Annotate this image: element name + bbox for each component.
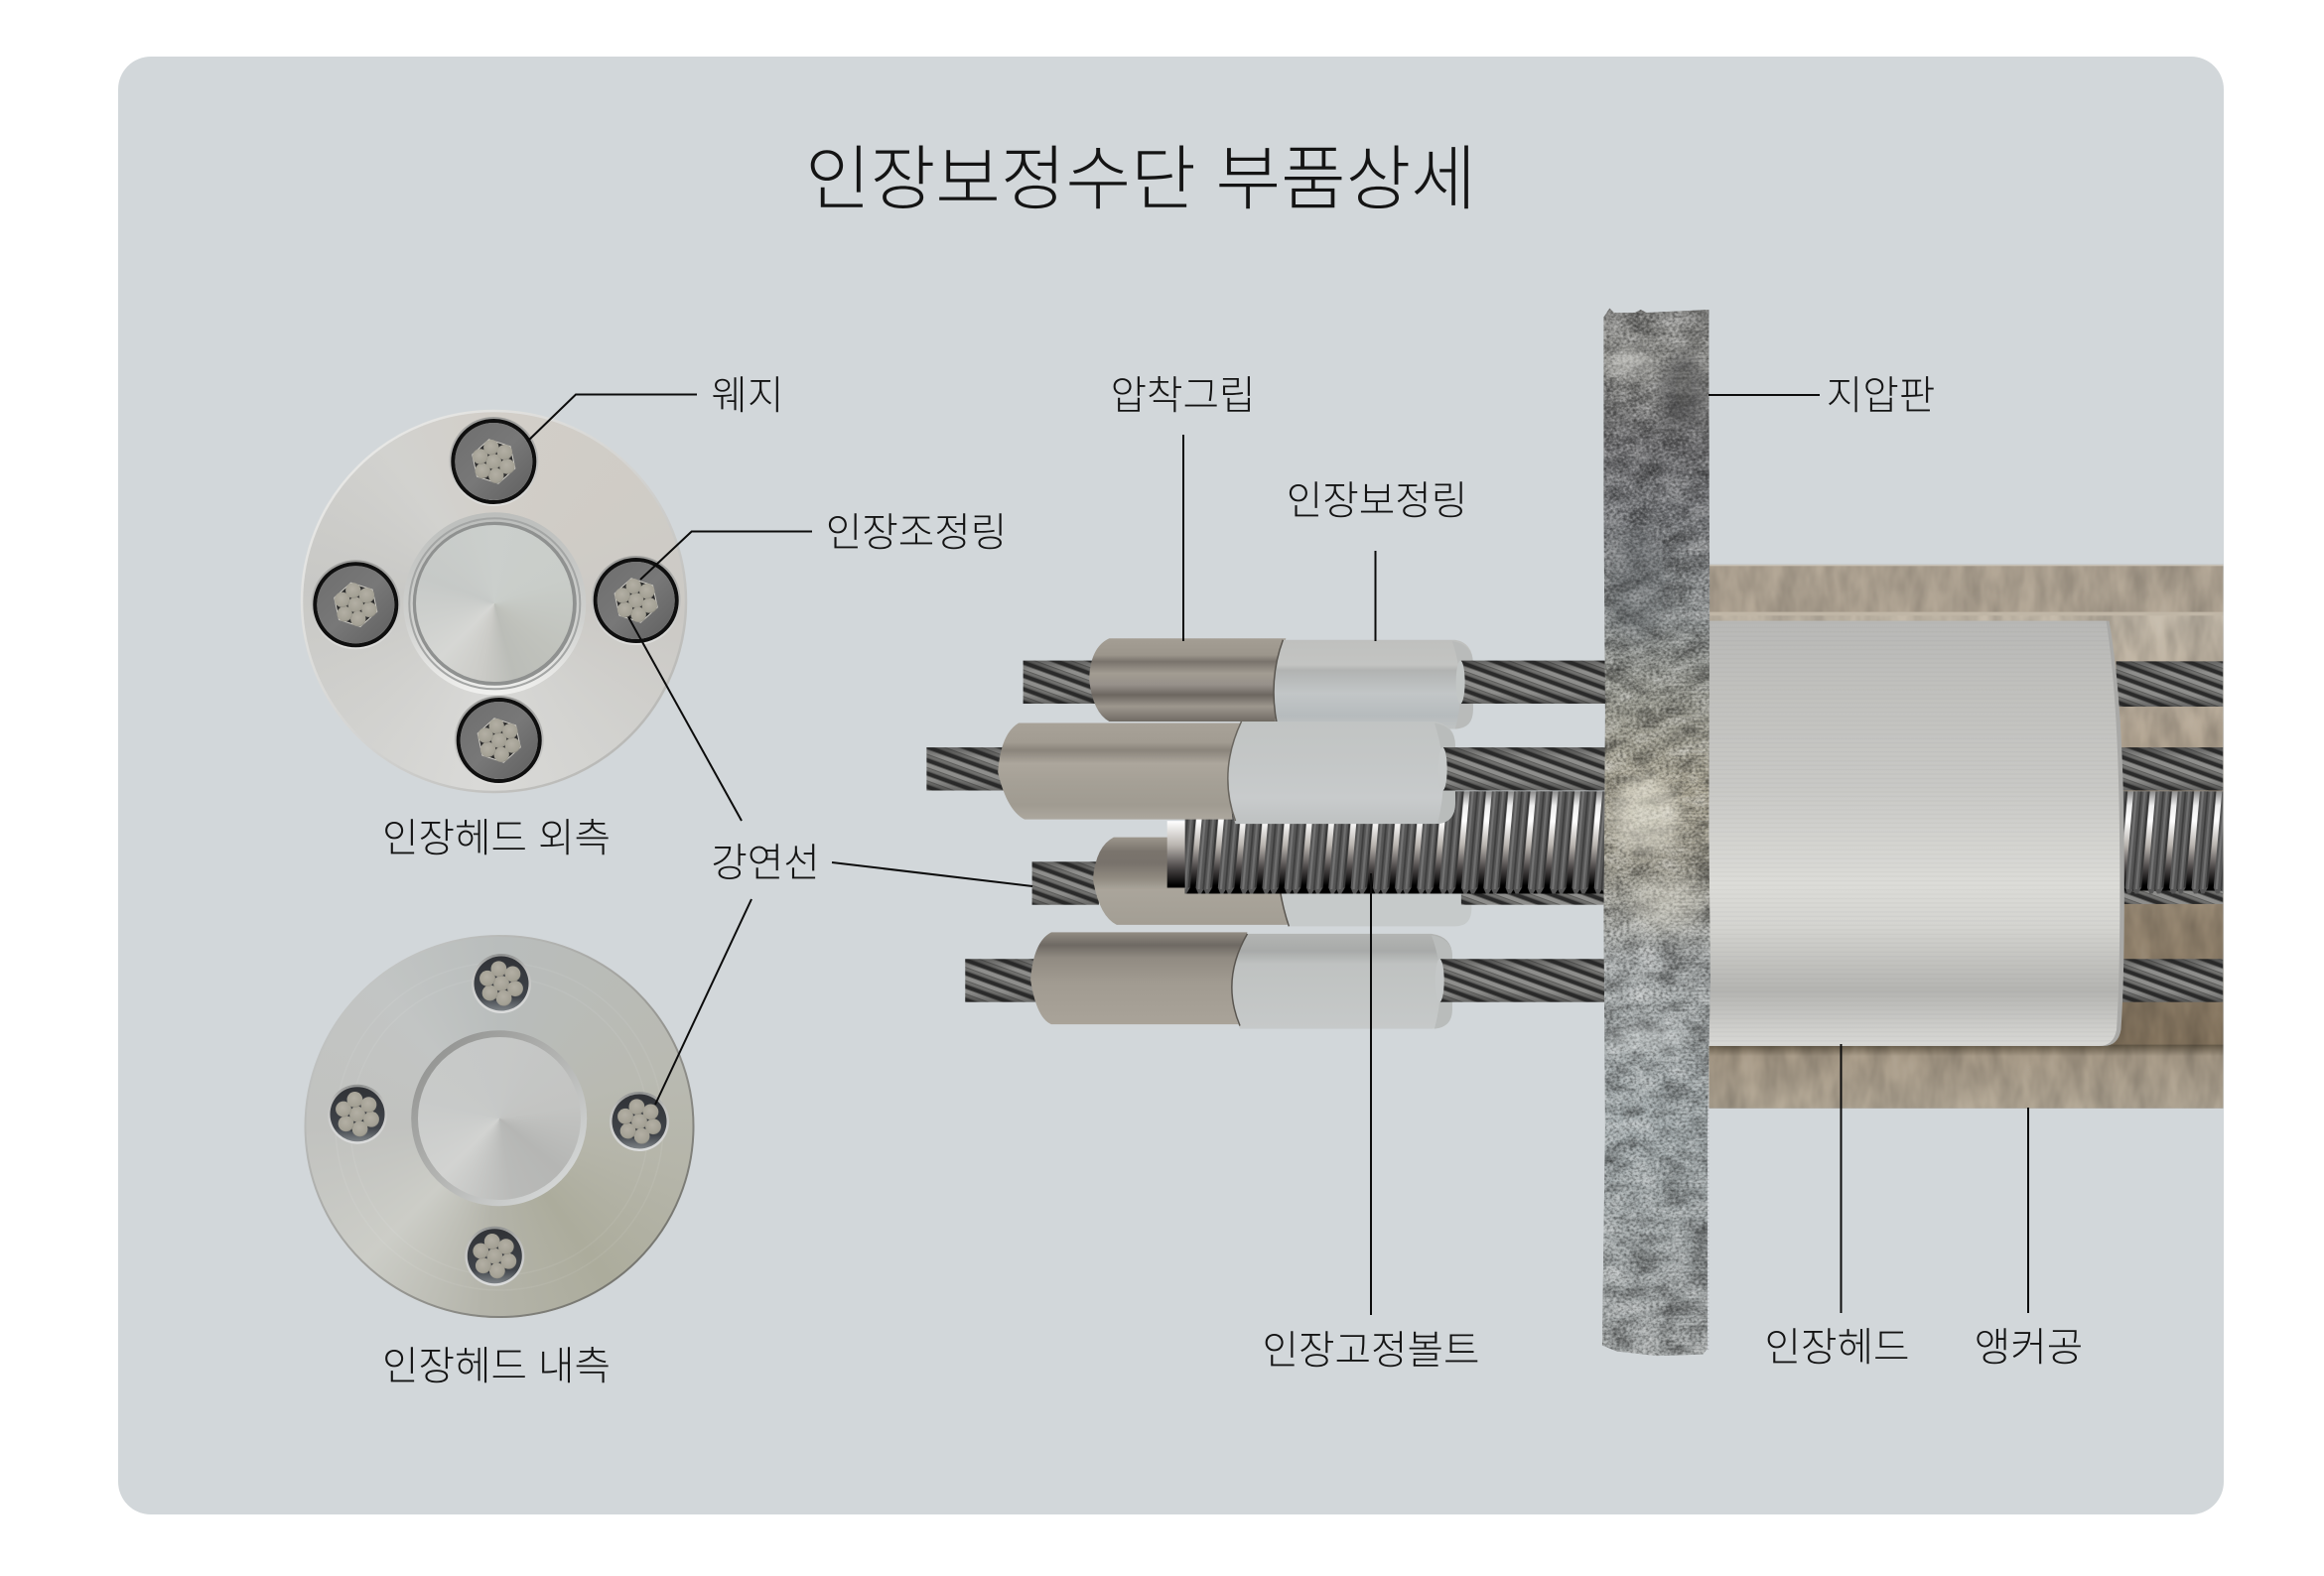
leader: wedge <box>527 395 697 442</box>
label: tension adjustment ring: 인장조정링 <box>826 511 1007 555</box>
wedge right <box>592 556 681 645</box>
diagram canvas <box>301 145 2224 1383</box>
strand hole left <box>328 1085 387 1144</box>
row 3 compression grip <box>1093 838 1288 925</box>
threaded tension fixing bolt <box>1167 791 1611 893</box>
center boss of outer side <box>403 512 586 695</box>
grips and rings assembly <box>926 638 1611 1029</box>
leader: bearing plate <box>1709 394 1820 396</box>
label: strand: 강연선 <box>711 842 820 885</box>
label: fixing bolt: 인장고정볼트 <box>1262 1329 1480 1373</box>
leader: fixing bolt <box>1370 873 1372 1315</box>
label: compression grip: 압착그립 <box>1110 374 1256 418</box>
wedge left <box>311 560 400 649</box>
label: wedge: 웨지 <box>711 374 784 418</box>
wedge bottom <box>455 696 544 785</box>
row 1 strand <box>1024 661 1112 704</box>
row 1 tension compensation ring <box>1274 640 1611 728</box>
leader: strand to outer side <box>628 617 742 821</box>
center boss of inner side <box>411 1030 587 1206</box>
row 4 strand <box>965 959 1039 1002</box>
label: tension head: 인장헤드 <box>1764 1326 1910 1370</box>
strand hole bottom <box>465 1227 524 1286</box>
strand hole right <box>610 1092 669 1151</box>
disc: tension head outer side <box>301 410 687 793</box>
title: 인장보정수단 부품상세 <box>805 140 1476 219</box>
label: bearing plate: 지압판 <box>1827 374 1935 418</box>
leader: compression grip <box>1182 435 1184 641</box>
row 2 strand <box>926 747 1016 791</box>
tension head cylinder <box>1709 621 2124 1046</box>
leader: anchor hole <box>2027 1108 2029 1313</box>
label: compensation ring: 인장보정링 <box>1287 479 1467 523</box>
row 3 tension compensation ring <box>1277 838 1611 926</box>
disc: tension head inner side <box>305 936 694 1318</box>
row 2 tension compensation ring <box>1228 722 1611 824</box>
leader: compensation ring <box>1374 551 1376 641</box>
row 4 compression grip <box>1030 932 1247 1024</box>
label: anchor hole: 앵커공 <box>1975 1326 2083 1370</box>
leader: tension head <box>1841 1044 1843 1313</box>
strands and bolt behind head <box>2117 661 2223 1002</box>
leader: tension adjustment ring <box>640 532 812 580</box>
row 3 strand <box>1032 861 1099 905</box>
bearing plate <box>1602 309 1710 1356</box>
row 1 compression grip <box>1089 638 1286 722</box>
anchor hole <box>1709 565 2224 1109</box>
row 4 tension compensation ring <box>1232 934 1611 1029</box>
wedge top <box>449 417 538 506</box>
leader: strand to inner side <box>655 899 752 1105</box>
leader: strand to cable <box>832 862 1032 886</box>
label: head outer: 인장헤드 외측 <box>382 817 611 860</box>
strand hole top <box>472 954 531 1013</box>
row 2 compression grip <box>998 722 1241 820</box>
label: head inner: 인장헤드 내측 <box>382 1345 611 1388</box>
